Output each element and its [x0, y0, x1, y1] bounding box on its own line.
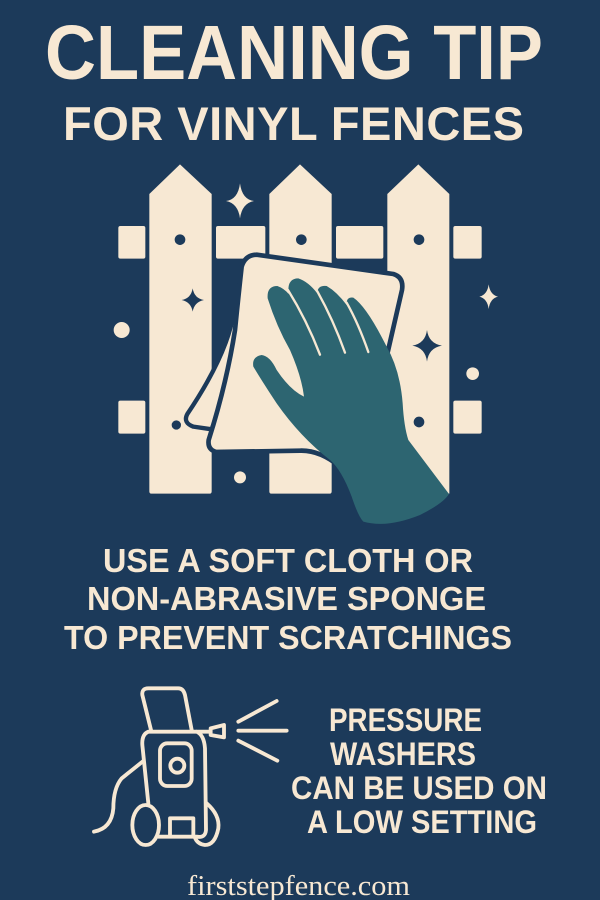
- cream sparkle top: [226, 183, 254, 218]
- main tip text: [64, 542, 512, 656]
- cloth front: [208, 255, 402, 467]
- pressure washer tip text: A LOW SETTING: [307, 804, 537, 840]
- pressure washer tip text: [291, 702, 547, 840]
- navy sparkle left: [182, 288, 204, 312]
- washer foot: [170, 818, 193, 836]
- main tip text: USE A SOFT CLOTH OR: [103, 542, 473, 579]
- navy sparkle right: [412, 330, 442, 362]
- title: [45, 10, 543, 150]
- pressure washer tip text: CAN BE USED ON: [291, 770, 547, 806]
- washer handle: [142, 688, 192, 730]
- pressure washer tip text: WASHERS: [330, 736, 476, 772]
- finger separators: [288, 290, 368, 355]
- blue glove: [253, 278, 449, 524]
- fence bolts: [175, 234, 424, 427]
- pressure washer tip text: PRESSURE: [329, 702, 482, 738]
- cloth back flap: [186, 309, 240, 429]
- cream dots: [114, 322, 479, 483]
- subheading: for vinyl fences: FOR VINYL FENCES: [63, 97, 524, 150]
- washer left wheel: [132, 805, 159, 845]
- fence rails: [118, 226, 482, 434]
- washer hose: [94, 761, 143, 832]
- water spray lines: [238, 701, 287, 761]
- washer nozzle: [211, 725, 224, 737]
- washer body: [142, 732, 210, 837]
- bolt behind cloth: [172, 420, 181, 430]
- sparkles and dots: [114, 183, 498, 483]
- glove shape: [253, 278, 449, 524]
- washer right wheel: [195, 803, 219, 845]
- main tip text: NON-ABRASIVE SPONGE: [87, 580, 486, 617]
- main tip text: TO PREVENT SCRATCHINGS: [64, 619, 512, 656]
- cream sparkle right: [479, 284, 498, 309]
- heading: cleaning tip: CLEANING TIP: [45, 10, 543, 96]
- fence pickets: [149, 164, 449, 494]
- icon: pressure washer: [94, 688, 287, 845]
- illustration: gloved hand wiping fence: [114, 164, 498, 524]
- washer gauge: [170, 759, 184, 773]
- washer control panel: [160, 743, 192, 786]
- cloth: [172, 255, 402, 467]
- fence: [118, 164, 482, 494]
